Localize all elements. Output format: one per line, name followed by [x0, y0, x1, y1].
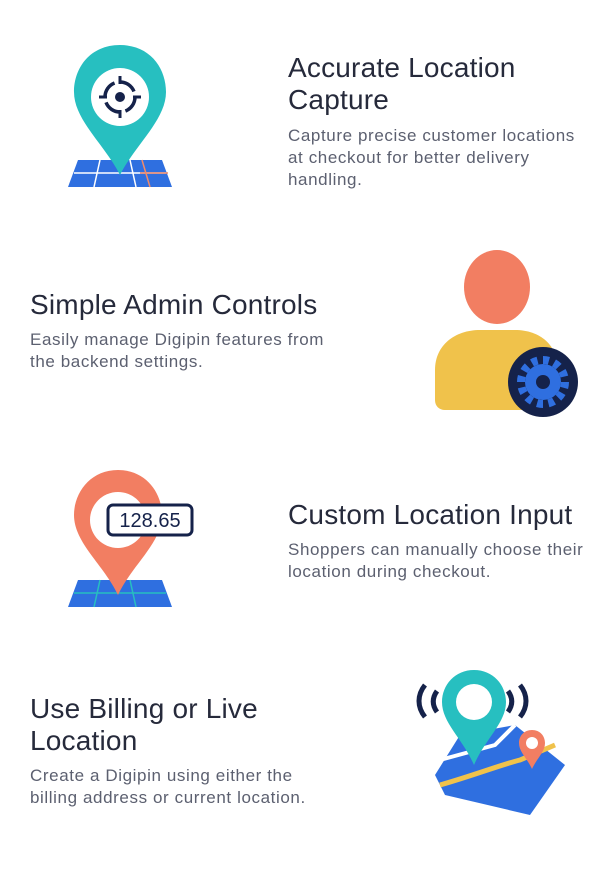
- heading: Custom Location Input: Custom Location Input: [288, 499, 572, 530]
- map base: [68, 580, 172, 607]
- text: admin description: the backend settings.: [30, 352, 203, 371]
- text: billing description: billing address or current location.: [30, 788, 306, 807]
- text: billing description: Create a Digipin using either the: [30, 766, 293, 785]
- text: capture description: Capture precise customer locations: [288, 126, 575, 145]
- heading: Accurate Location Capture: [288, 52, 516, 115]
- text: admin description: Easily manage Digipin features from: [30, 330, 324, 349]
- heading: Accurate Location Capture: Capture: [288, 84, 389, 115]
- heading: Use Billing or Live Location: Use Billing or Live: [30, 693, 258, 724]
- text: capture description: handling.: [288, 170, 362, 189]
- pin: [74, 470, 192, 595]
- pin: 128.65: [119, 510, 181, 532]
- icon: admin person with gear: [435, 250, 578, 417]
- heading: Use Billing or Live Location: [30, 693, 258, 756]
- heading: Simple Admin Controls: Simple Admin Controls: [30, 289, 317, 320]
- text: custom description: Shoppers can manually choose their: [288, 540, 583, 559]
- icon: live location map: [416, 670, 565, 815]
- pin: [74, 45, 166, 175]
- icon: teal pin with target: [68, 45, 172, 188]
- text: admin description: [30, 330, 324, 371]
- text: custom description: [288, 540, 583, 581]
- text: billing description: [30, 766, 306, 807]
- text: custom description: location during checkout.: [288, 562, 491, 581]
- text: capture description: [288, 126, 575, 189]
- heading: Use Billing or Live Location: Location: [30, 725, 137, 756]
- map base: [68, 160, 172, 187]
- text: capture description: at checkout for better delivery: [288, 148, 530, 167]
- icon: orange pin with number: [68, 470, 194, 608]
- heading: Accurate Location Capture: Accurate Location: [288, 52, 516, 83]
